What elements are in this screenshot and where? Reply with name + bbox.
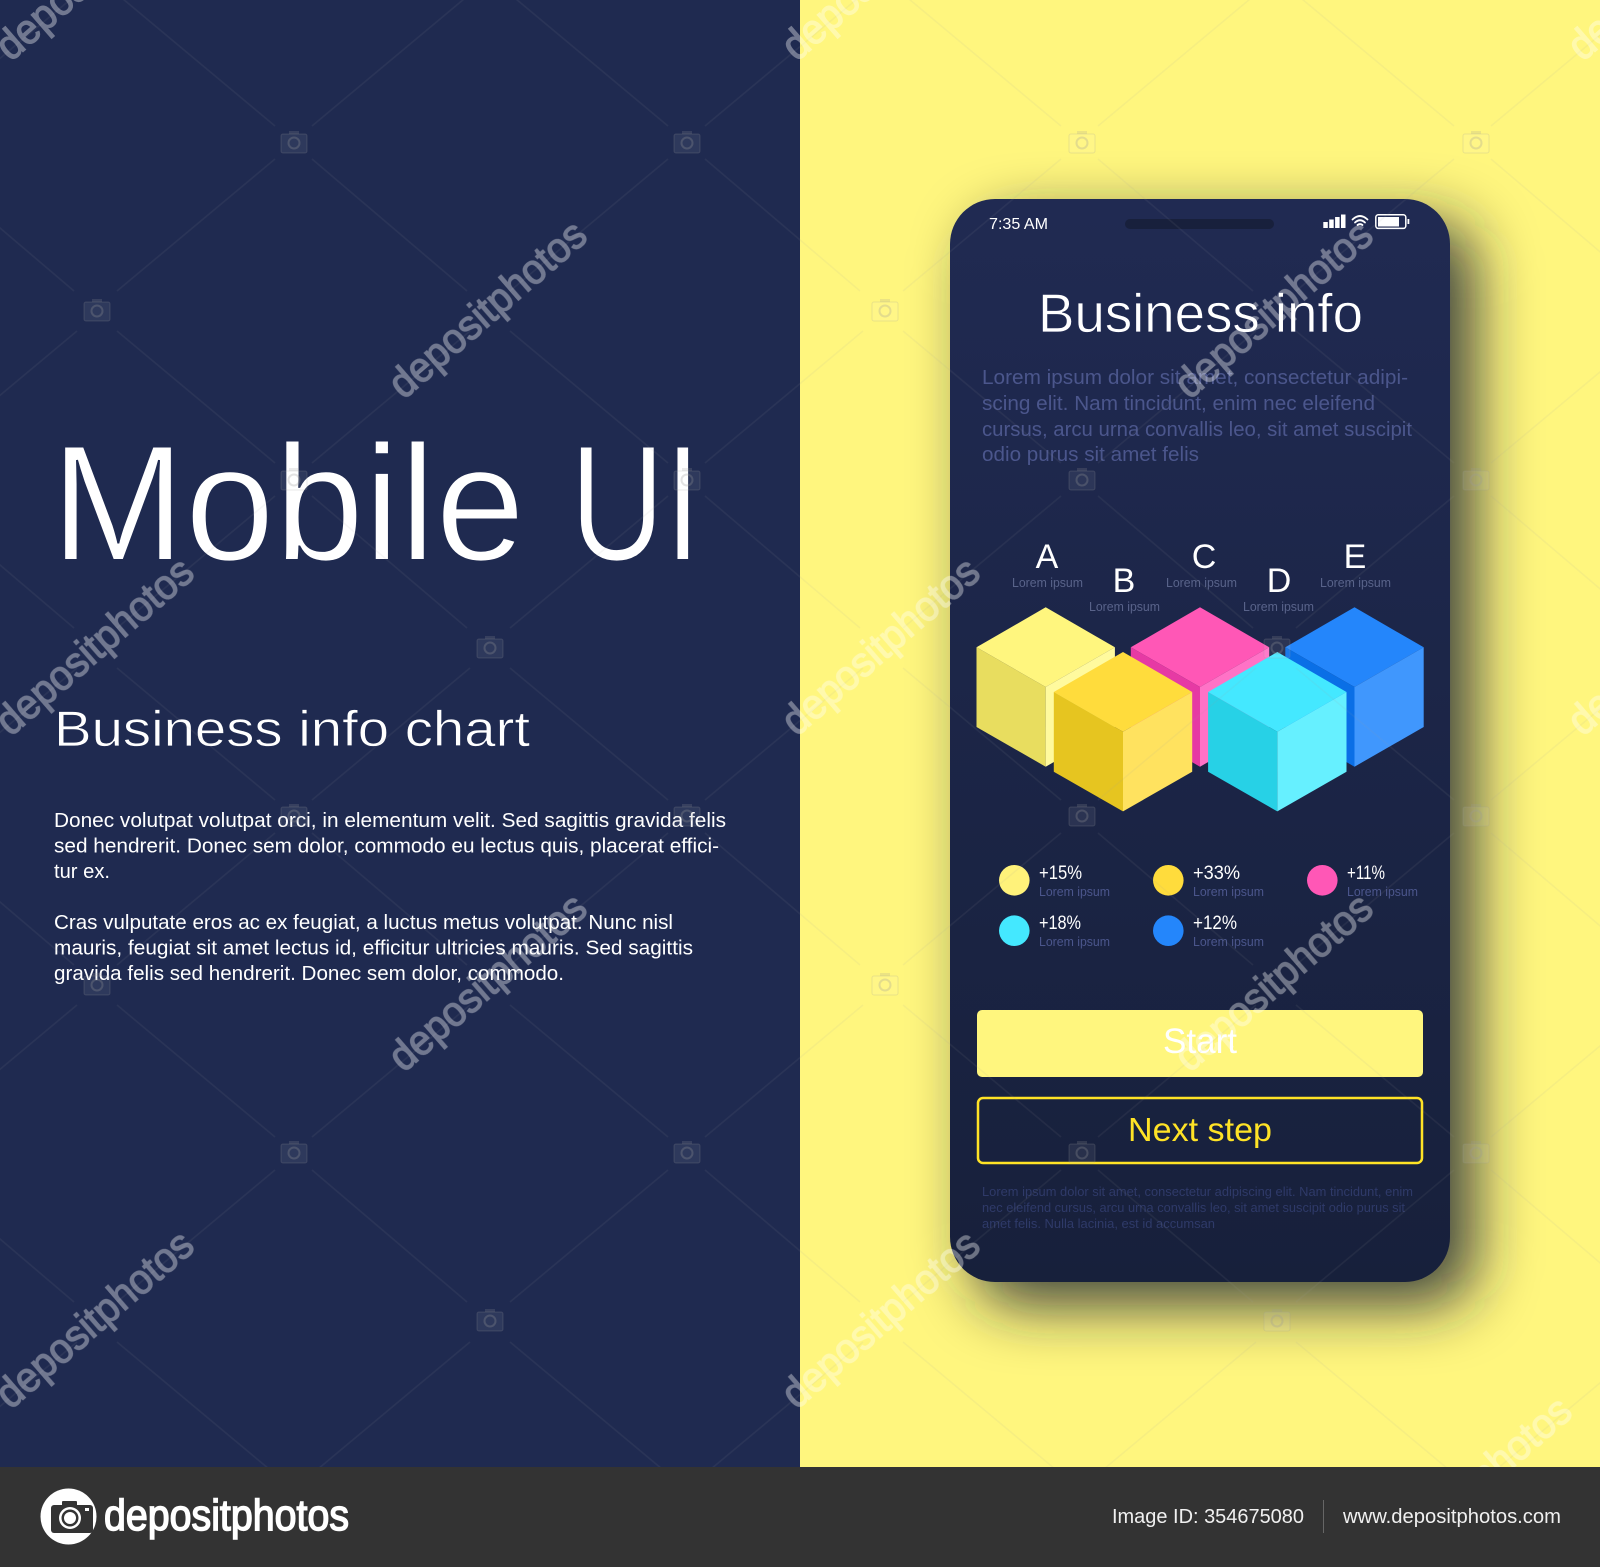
legend item +11%: [1307, 863, 1418, 899]
phone intro paragraph: Lorem ipsum dolor sit amet, consectetur adipi-: [982, 367, 1408, 389]
chart labels A to E: D: [1267, 562, 1291, 600]
legend item +11%: +11%: [1347, 863, 1385, 884]
repeating depositphotos watermarks: depositphotos: [379, 210, 595, 407]
repeating depositphotos watermarks: depositphotos: [1165, 883, 1381, 1080]
panel: yellow right background: [800, 0, 1600, 1467]
phone notch: [1125, 219, 1274, 229]
text block: second paragraph: gravida felis sed hendrerit. Donec sem dolor, commodo.: [54, 963, 564, 985]
chart sublabels: Lorem ipsum: [1166, 575, 1237, 590]
footer logo wordmark: depositphotos: [104, 1491, 349, 1540]
repeating depositphotos watermarks: depositphotos: [379, 883, 595, 1080]
legend item +15%: [999, 863, 1110, 899]
footer site url: www.depositphotos.com: [1342, 1506, 1561, 1528]
button: Next step: Next step: [1128, 1111, 1272, 1148]
text block: first paragraph: [54, 810, 726, 883]
footnote text: [982, 1184, 1413, 1231]
footer divider: [1323, 1500, 1324, 1533]
repeating depositphotos watermarks: depositphotos: [1165, 210, 1381, 407]
button: Start: [977, 1010, 1423, 1077]
legend item +18%: +18%: [1039, 913, 1081, 934]
cube C pink: [1131, 607, 1269, 767]
chart sublabels: Lorem ipsum: [1320, 575, 1391, 590]
phone heading: Business info: Business info: [1038, 282, 1363, 344]
cube D cyan: [1208, 652, 1346, 811]
phone intro paragraph: odio purus sit amet felis: [982, 444, 1199, 466]
legend item +12%: Lorem ipsum: [1193, 934, 1264, 949]
text block: second paragraph: [54, 912, 693, 985]
button: Next step: [978, 1098, 1422, 1163]
cube B gold: [1054, 652, 1192, 811]
status bar time: 7:35 AM: [989, 216, 1048, 233]
text block: first paragraph: Donec volutpat volutpat orci, in elementum velit. Sed sagittis gravida felis: [54, 810, 726, 832]
text block: second paragraph: Cras vulputate eros ac ex feugiat, a luctus metus volutpat. Nunc nisl: [54, 912, 673, 934]
footnote text: amet felis. Nulla lacinia, est id accumsan: [982, 1216, 1215, 1231]
isometric cube chart: [976, 607, 1424, 811]
chart sublabels: Lorem ipsum: [1243, 599, 1314, 614]
chart sublabels: Lorem ipsum: [1012, 575, 1083, 590]
footnote text: nec eleifend cursus, arcu urna convallis leo, sit amet suscipit odio purus sit: [982, 1200, 1405, 1215]
text block: second paragraph: mauris, feugiat sit amet lectus id, efficitur ultricies mauris. Sed sagittis: [54, 938, 693, 960]
subtitle: Business info chart: Business info chart: [54, 701, 530, 757]
legend item +12%: [1153, 913, 1264, 949]
repeating depositphotos watermarks: depositphotos: [772, 547, 988, 744]
chart labels A to E: A: [1036, 538, 1059, 576]
text block: first paragraph: tur ex.: [54, 861, 110, 883]
chart sublabels: [1012, 575, 1391, 614]
title: Mobile UI: Mobile: [51, 411, 525, 595]
legend item +33%: [1153, 863, 1264, 899]
legend item +12%: +12%: [1193, 913, 1237, 934]
phone intro paragraph: [982, 367, 1412, 466]
legend item +15%: +15%: [1039, 863, 1082, 884]
button: Start: Start: [1163, 1022, 1237, 1061]
watermark camera icons: [84, 131, 1489, 1331]
repeating depositphotos watermarks: depositphotos: [772, 1220, 988, 1417]
text block: first paragraph: sed hendrerit. Donec sem dolor, commodo eu lectus quis, placerat effici-: [54, 836, 719, 858]
chart sublabels: Lorem ipsum: [1089, 599, 1160, 614]
title: Mobile UI: UI: [570, 411, 701, 595]
chart labels A to E: E: [1344, 538, 1366, 576]
legend item +11%: Lorem ipsum: [1347, 884, 1418, 899]
panel: navy left background: [0, 0, 800, 1467]
cube A yellow: [976, 607, 1115, 767]
icon: battery: [1376, 215, 1409, 228]
phone mockup: [950, 199, 1450, 1282]
legend: [999, 863, 1418, 949]
phone body: [950, 199, 1450, 1282]
footer bar: [0, 1467, 1600, 1567]
chart labels A to E: [1036, 538, 1366, 600]
legend item +33%: Lorem ipsum: [1193, 884, 1264, 899]
icon: wifi: [1352, 216, 1368, 225]
legend item +18%: Lorem ipsum: [1039, 934, 1110, 949]
footer image id: Image ID: 354675080: [1112, 1506, 1304, 1528]
phone drop shadow: [975, 222, 1475, 1305]
legend item +15%: Lorem ipsum: [1039, 884, 1110, 899]
legend item +33%: +33%: [1193, 863, 1240, 884]
icon: signal bars: [1323, 214, 1346, 228]
chart labels A to E: B: [1113, 562, 1135, 600]
footnote text: Lorem ipsum dolor sit amet, consectetur adipiscing elit. Nam tincidunt, enim: [982, 1184, 1413, 1199]
phone intro paragraph: scing elit. Nam tincidunt, enim nec eleifend: [982, 393, 1375, 415]
chart labels A to E: C: [1192, 538, 1216, 576]
cube E blue: [1285, 607, 1424, 767]
footer logo icon: [40, 1488, 96, 1544]
legend item +18%: [999, 913, 1110, 949]
phone intro paragraph: cursus, arcu urna convallis leo, sit amet suscipit: [982, 419, 1412, 441]
